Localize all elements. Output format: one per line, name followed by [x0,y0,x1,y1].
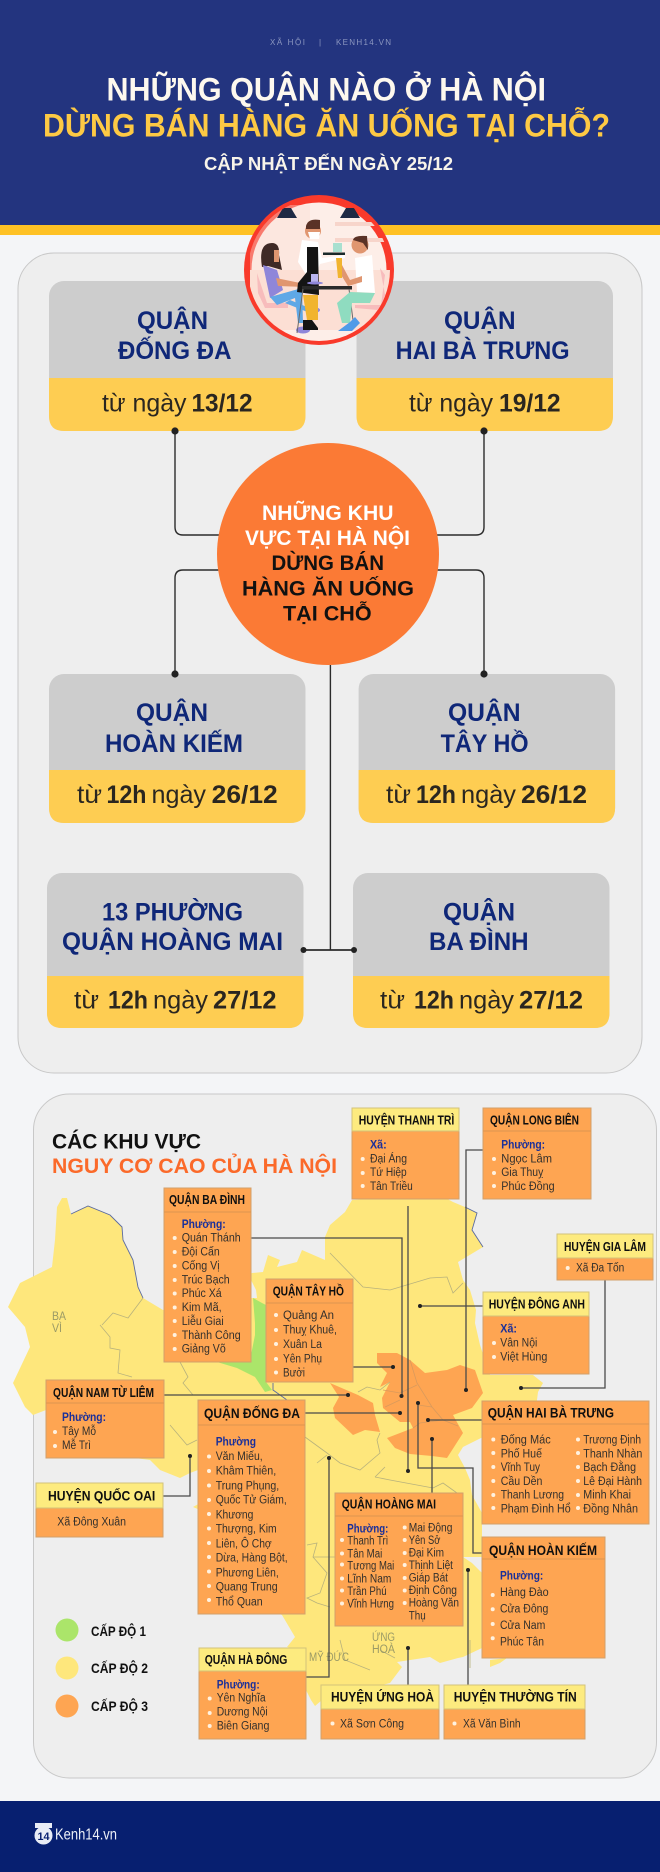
box: Quận Hoàn Kiếm: QUẬN HOÀN KIẾM [489,1543,597,1558]
card: Tây Hồ: ngày [461,781,516,809]
box: Quận Hai Bà Trưng: Phố Huế [501,1448,543,1460]
box: Quận Ba Đình: Quán Thánh [182,1233,241,1245]
box: Huyện Đông Anh: Vân Nội [500,1338,537,1350]
card: Hoàn Kiếm: HOÀN KIẾM [105,729,243,758]
box: Quận Nam Từ Liêm: QUẬN NAM TỪ LIÊM [53,1385,154,1400]
box: Quận Tây Hồ: Thuỵ Khuê, [283,1324,337,1336]
card: Tây Hồ: 26/12 [521,781,587,809]
legend: CẤP ĐỘ 2 [91,1659,148,1676]
card: Hai Bà Trưng: 19/12 [499,390,561,418]
card: Đống Đa: 13/12 [192,390,252,418]
box: Quận Hoàng Mai: QUẬN HOÀNG MAI [342,1497,436,1512]
box: Quận Tây Hồ: Xuân La [283,1339,323,1351]
box: Quận Hai Bà Trưng: Thanh Lương [501,1490,564,1502]
card: 13 phường Hoàng Mai: 12h [108,986,148,1014]
card: Tây Hồ: TÂY HỒ [441,728,529,758]
card: Hoàn Kiếm [49,674,306,823]
card: Đống Đa: từ ngày [102,390,187,418]
box: Quận Hoàng Mai: Tương Mai [347,1561,394,1573]
box: Quận Hà Đông [199,1648,306,1739]
box: Quận Hai Bà Trưng: Phạm Đình Hổ [501,1504,571,1516]
box: Quận Long Biên: Gia Thuỵ [501,1167,544,1179]
box: Quận Nam Từ Liêm: Phường: [62,1412,106,1424]
center circle: HÀNG ĂN UỐNG [242,577,414,601]
card: Hai Bà Trưng: HAI BÀ TRƯNG [396,336,570,365]
map labels: VÌ [52,1322,62,1335]
kicker: section and site [270,38,391,47]
box: Quận Hoàn Kiếm: Cửa Đông [500,1604,548,1616]
box: Quận Long Biên [483,1108,591,1199]
title [43,72,610,174]
box: Quận Hoàng Mai: Trần Phú [347,1586,387,1598]
box: Quận Tây Hồ [266,1279,353,1382]
box: Quận Hoàng Mai: Yên Sở [409,1535,441,1547]
box: Quận Hoàng Mai: Thanh Trì [347,1536,388,1548]
box: Quận Ba Đình: Thành Công [182,1330,241,1342]
box: Quận Hai Bà Trưng [482,1401,649,1524]
box: Huyện Thanh Trì: Đại Áng [370,1152,407,1165]
card: Đống Đa [49,281,306,431]
kicker: section and site: | [319,38,321,47]
card: Ba Đình [353,873,610,1028]
box: Quận Hoàng Mai: Đại Kim [409,1548,444,1560]
box: Quận Hà Đông: Phường: [217,1679,260,1691]
box: Quận Tây Hồ: Quảng An [283,1310,334,1322]
center circle: DỪNG BÁN [272,551,384,575]
box: Huyện Gia Lâm: Xã Đa Tốn [576,1263,624,1275]
header band [0,0,660,235]
box: Quận Đống Đa: QUẬN ĐỐNG ĐA [204,1406,300,1421]
box: Quận Hai Bà Trưng: Vĩnh Tuy [501,1462,540,1474]
box: Huyện Thanh Trì [352,1108,459,1199]
box: Quận Hoàn Kiếm: Hàng Đào [500,1587,549,1599]
card: 13 phường Hoàng Mai: 27/12 [213,986,276,1014]
card: Hai Bà Trưng: QUẬN [444,305,516,335]
box: Quận Hai Bà Trưng: Trương Định [583,1434,641,1446]
card: Hoàn Kiếm: 12h [106,781,146,809]
card: Ba Đình: ngày [459,986,514,1014]
box: Huyện Thanh Trì: Tân Triều [370,1181,413,1193]
box: Quận Ba Đình: Giảng Võ [182,1344,226,1356]
title: DỪNG BÁN HÀNG ĂN UỐNG TẠI CHỖ? [43,108,610,144]
map heading: NGUY CƠ CAO CỦA HÀ NỘI [52,1154,337,1178]
box: Huyện Thanh Trì: HUYỆN THANH TRÌ [359,1112,454,1127]
box: Huyện Ứng Hoà: HUYỆN ỨNG HOÀ [331,1690,434,1705]
box: Quận Đống Đa [198,1400,305,1614]
card: 13 phường Hoàng Mai: 13 PHƯỜNG [102,896,243,926]
box: Quận Nam Từ Liêm: Tây Mỗ [62,1425,96,1438]
legend: CẤP ĐỘ 3 [91,1697,148,1714]
box: Huyện Đông Anh [483,1292,589,1374]
map labels: BA [52,1311,66,1323]
box: Quận Hoàng Mai [335,1493,463,1626]
box: Quận Hoàng Mai: Mai Động [409,1523,452,1535]
box: Quận Hoàng Mai: Thịnh Liệt [409,1560,454,1572]
card: Tây Hồ [359,674,615,823]
title: CẬP NHẬT ĐẾN NGÀY 25/12 [204,153,453,174]
box: Quận Đống Đa: Trung Phụng, [216,1480,279,1492]
box: Huyện Thường Tín: Xã Văn Bình [463,1718,521,1730]
legend: CẤP ĐỘ 1 [91,1622,146,1639]
box: Quận Đống Đa: Khâm Thiên, [216,1466,276,1478]
box: Quận Hoàng Mai: Định Công [409,1585,457,1597]
map labels: HOÀ [372,1643,395,1656]
box: Quận Hoàng Mai: Lĩnh Nam [347,1573,391,1585]
box: Huyện Đông Anh: Xã: [500,1324,517,1336]
card: Hoàn Kiếm: QUẬN [136,697,208,727]
box: Quận Hà Đông: Yên Nghĩa [217,1693,266,1705]
card: Ba Đình: BA ĐÌNH [429,927,529,956]
card: 13 phường Hoàng Mai [47,873,304,1028]
box: Quận Hoàng Mai: Hoàng Văn [409,1598,459,1610]
card: 13 phường Hoàng Mai: từ [74,986,99,1014]
box: Quận Đống Đa: Quang Trung [216,1582,278,1594]
box: Huyện Thường Tín: HUYỆN THƯỜNG TÍN [454,1690,577,1705]
box: Quận Hai Bà Trưng: Thanh Nhàn [583,1448,642,1460]
box: Quận Đống Đa: Văn Miếu, [216,1451,263,1463]
footer logo [34,1823,117,1844]
box: Quận Ba Đình: Đội Cấn [182,1246,220,1258]
map heading [52,1131,337,1178]
box: Quận Hai Bà Trưng: Đồng Nhân [583,1504,638,1516]
footer logo: 14 [38,1831,50,1843]
connector lines [175,431,484,950]
box: Quận Hai Bà Trưng: Lê Đại Hành [583,1476,642,1488]
center circle: TẠI CHỖ [283,602,372,626]
box: Quận Đống Đa: Phương Liên, [216,1567,279,1579]
box: Quận Nam Từ Liêm [46,1380,164,1458]
card: Hoàn Kiếm: ngày [152,781,206,809]
box: Quận Đống Đa: Quốc Tử Giám, [216,1495,287,1507]
map: Hanoi risk levels [8,1195,543,1706]
card: Hai Bà Trưng: từ ngày [409,390,493,418]
card: Hoàn Kiếm: từ [77,781,102,809]
kicker: section and site: KENH14.VN [336,38,391,47]
box: Huyện Ứng Hoà [321,1685,439,1739]
box: Quận Hà Đông: Biên Giang [217,1721,269,1733]
title: NHỮNG QUẬN NÀO Ở HÀ NỘI [106,72,546,108]
box: Quận Hoàng Mai: Thụ [409,1610,426,1622]
card: Ba Đình: QUẬN [443,896,515,926]
card: Đống Đa: QUẬN [137,305,208,335]
box: Huyện Thanh Trì: Xã: [370,1139,387,1151]
box: Quận Tây Hồ: Bưởi [283,1368,305,1380]
icon: restaurant scene [244,195,394,350]
box: Quận Hai Bà Trưng: QUẬN HAI BÀ TRƯNG [488,1405,614,1420]
card: Tây Hồ: từ [386,781,411,809]
kicker: section and site: XÃ HỘI [270,38,305,47]
box: Quận Ba Đình: Liễu Giai [182,1315,224,1328]
box: Quận Hoàng Mai: Giáp Bát [409,1573,449,1585]
box: Huyện Thường Tín [444,1685,585,1739]
connector dots [171,427,488,953]
box: Quận Ba Đình: Phường: [182,1219,226,1231]
card: Đống Đa: ĐỐNG ĐA [118,335,232,365]
box: Huyện Đông Anh: Việt Hùng [500,1352,547,1364]
box: Quận Nam Từ Liêm: Mễ Trì [62,1439,91,1452]
legend [56,1618,148,1718]
card: Ba Đình: 27/12 [519,986,583,1014]
box: Quận Tây Hồ: Yên Phụ [283,1354,322,1366]
box: Quận Đống Đa: Liên, Ô Chợ [216,1537,272,1550]
box: Quận Long Biên: QUẬN LONG BIÊN [490,1112,579,1127]
box: Quận Hai Bà Trưng: Minh Khai [583,1490,631,1502]
box: Quận Ba Đình [164,1188,251,1362]
box: Quận Đống Đa: Phường [216,1437,256,1449]
box: Huyện Quốc Oai: HUYỆN QUỐC OAI [48,1489,155,1504]
box: Quận Hoàn Kiếm: Phúc Tân [500,1636,544,1648]
box: Quận Đống Đa: Dừa, Hàng Bột, [216,1553,288,1565]
map labels: ỨNG [372,1631,395,1644]
box: Quận Hà Đông: Dương Nội [217,1707,268,1719]
card: 13 phường Hoàng Mai: ngày [153,986,208,1014]
box: Quận Hoàng Mai: Phường: [347,1523,388,1535]
box: Quận Đống Đa: Khương [216,1509,253,1521]
box: Quận Hoàn Kiếm: Cửa Nam [500,1620,545,1632]
box: Quận Hoàng Mai: Vĩnh Hưng [347,1598,394,1610]
box: Quận Ba Đình: Kim Mã, [182,1302,222,1314]
box: Quận Hoàng Mai: Tân Mai [347,1548,382,1560]
card: Hai Bà Trưng [356,281,613,431]
box: Quận Hoàn Kiếm [482,1537,605,1658]
map labels [52,1311,395,1664]
box: Huyện Quốc Oai [36,1483,163,1537]
box: Huyện Gia Lâm [557,1234,653,1280]
box: Quận Hà Đông: QUẬN HÀ ĐÔNG [205,1652,287,1667]
box: Quận Long Biên: Ngọc Lâm [501,1153,552,1165]
box: Quận Hai Bà Trưng: Bạch Đằng [583,1461,636,1474]
center circle [217,443,439,665]
box: Quận Long Biên: Phúc Đồng [501,1181,555,1193]
card: Tây Hồ: 12h [416,781,456,809]
box: Huyện Đông Anh: HUYỆN ĐÔNG ANH [489,1297,585,1312]
box: Quận Ba Đình: Cống Vị [182,1260,220,1272]
center circle: VỰC TẠI HÀ NỘI [245,526,410,550]
box: Quận Đống Đa: Thượng, Kim [216,1524,277,1536]
box: Quận Ba Đình: Trúc Bạch [182,1274,230,1286]
box: Quận Hai Bà Trưng: Đống Mác [501,1434,551,1446]
card: Hoàn Kiếm: 26/12 [212,781,278,809]
box: Quận Ba Đình: QUẬN BA ĐÌNH [169,1192,245,1207]
center circle: NHỮNG KHU [262,501,394,525]
box: Quận Hoàn Kiếm: Phường: [500,1570,543,1582]
map heading: CÁC KHU VỰC [52,1131,201,1154]
map labels: MỸ ĐỨC [309,1651,349,1664]
box: Quận Tây Hồ: QUẬN TÂY HỒ [273,1284,344,1299]
box: Huyện Thanh Trì: Tứ Hiệp [370,1167,407,1179]
panel: map section [34,1094,656,1778]
footer band [0,1801,660,1872]
card: Tây Hồ: QUẬN [448,697,521,727]
box: Huyện Ứng Hoà: Xã Sơn Công [340,1718,404,1730]
leader lines and dots [163,1150,605,1685]
box: Huyện Quốc Oai: Xã Đông Xuân [57,1517,126,1529]
box: Quận Hai Bà Trưng: Cầu Dền [501,1476,542,1488]
box: Quận Đống Đa: Thổ Quan [216,1596,263,1608]
box: Quận Long Biên: Phường: [501,1139,545,1151]
card: 13 phường Hoàng Mai: QUẬN HOÀNG MAI [62,926,283,956]
panel: closed districts [18,253,642,1073]
card: Ba Đình: từ [380,986,405,1014]
box: Quận Ba Đình: Phúc Xá [182,1288,222,1300]
card: Ba Đình: 12h [414,986,454,1014]
footer logo: Kenh14.vn [55,1826,117,1844]
